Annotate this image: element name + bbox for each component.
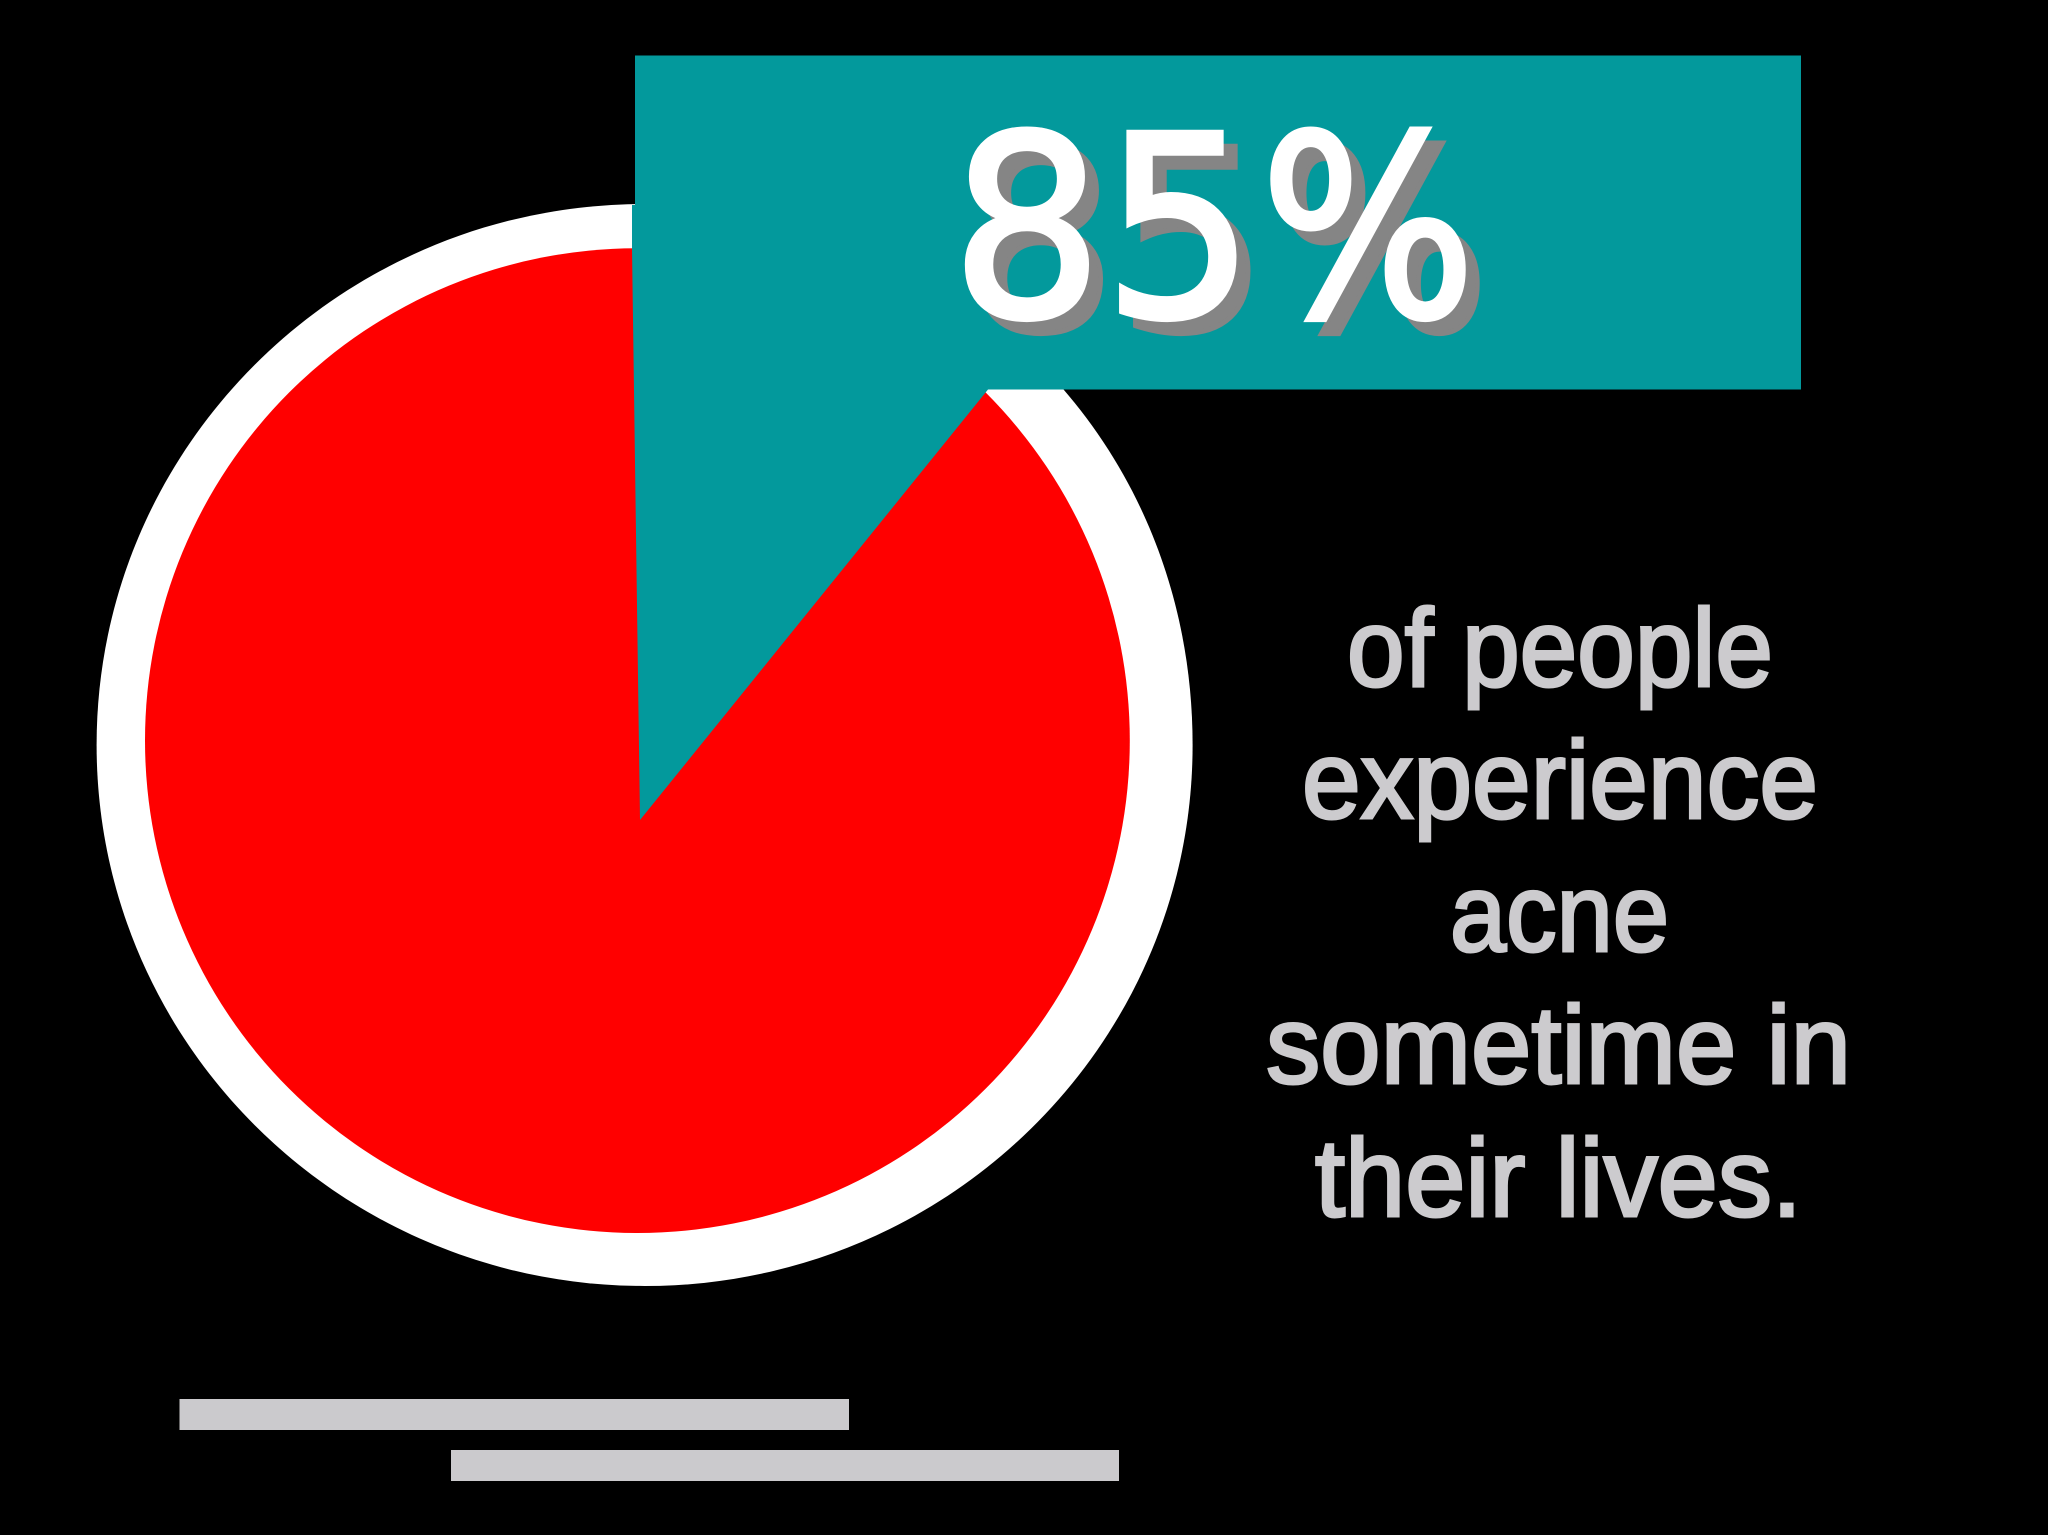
number shadow: 85 — [965, 97, 1269, 390]
pie chart: 85 percent — [97, 204, 1193, 1286]
headline number: 85% — [951, 83, 1490, 390]
number foreground — [951, 83, 1476, 376]
number foreground: 85 — [951, 83, 1255, 376]
pie outer white ring — [97, 204, 1193, 1286]
text block: description: their lives. — [1315, 1117, 1802, 1240]
number shadow: % — [1274, 97, 1490, 390]
text block: description: of people — [1347, 587, 1773, 710]
pie red slice — [145, 248, 1130, 1233]
text block: description: acne — [1450, 852, 1669, 975]
decorative bar: lower — [451, 1450, 1119, 1481]
text block: description: sometime in — [1266, 984, 1851, 1107]
decorative bar: upper — [180, 1399, 849, 1430]
callout: teal banner with wedge — [632, 56, 1801, 820]
number shadow — [965, 97, 1490, 390]
number foreground: % — [1260, 83, 1476, 376]
text block: description: experience — [1302, 719, 1818, 842]
text block: description — [1266, 587, 1851, 1240]
